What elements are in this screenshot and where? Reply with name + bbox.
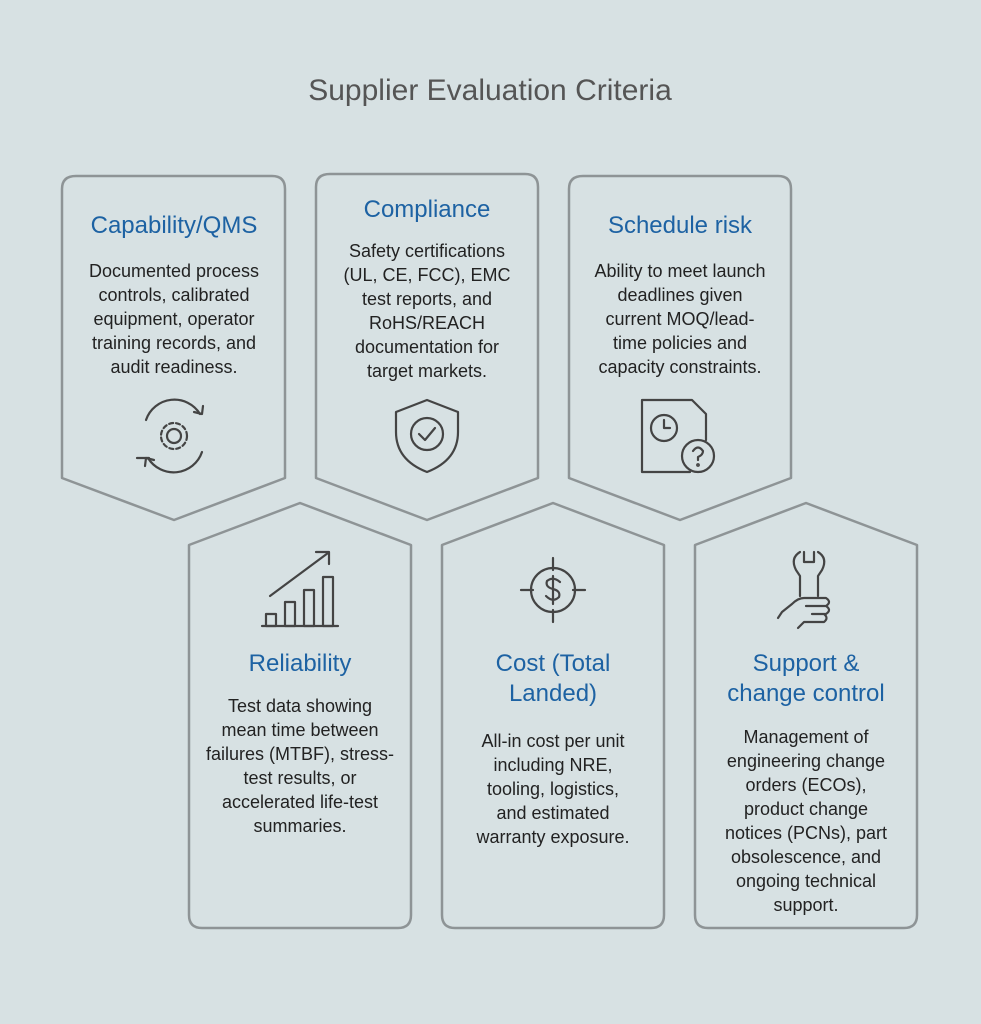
panel: reliability [189, 503, 411, 928]
panel: compliance [316, 174, 538, 520]
icon: dollar target [521, 558, 585, 622]
panel: schedule risk: Ability to meet launch [594, 261, 766, 281]
panel: schedule risk: time policies and [613, 333, 747, 353]
panel: compliance: (UL, CE, FCC), EMC [343, 265, 511, 285]
panel: support & change control [695, 503, 917, 928]
panel: schedule risk [569, 176, 791, 520]
panel: capability/QMS [62, 176, 285, 520]
panel: cost [442, 503, 664, 928]
panel: reliability: failures (MTBF), stress- [206, 744, 394, 764]
panel: support & change control: product change [744, 799, 868, 819]
panel: support & change control: engineering change [727, 751, 885, 771]
title: Supplier Evaluation Criteria [308, 74, 672, 107]
panel: reliability: mean time between [221, 720, 379, 740]
panel: schedule risk: capacity constraints. [598, 357, 762, 377]
panel: cost: and estimated [496, 803, 610, 823]
panel: capability/QMS: Documented process [89, 261, 259, 281]
panel: cost: including NRE, [493, 755, 613, 775]
panel: reliability: Test data showing [228, 696, 372, 716]
panel: reliability: test results, or [243, 768, 357, 788]
panel: compliance: test reports, and [362, 289, 492, 309]
panel: support & change control: orders (ECOs), [745, 775, 867, 795]
panel: support & change control: ongoing technical [736, 871, 876, 891]
panel: cost: All-in cost per unit [481, 731, 625, 751]
panel: compliance: Safety certifications [349, 241, 505, 261]
panel: support & change control: obsolescence, and [731, 847, 881, 867]
panel: schedule risk: Schedule risk [608, 212, 753, 239]
panel: cost: warranty exposure. [475, 827, 630, 847]
panel: compliance: Compliance [364, 196, 490, 223]
icon: clock doc question [642, 400, 714, 472]
panel: capability/QMS: controls, calibrated [98, 285, 250, 305]
panel: support & change control: Management of [743, 727, 870, 747]
panel: support & change control: support. [773, 895, 839, 915]
panel: cost: Cost (Total [496, 650, 610, 677]
panel: reliability: summaries. [253, 816, 347, 836]
panel: support & change control: change control [727, 680, 885, 707]
icon: bar chart up [262, 552, 338, 626]
panel: support & change control: Support & [753, 650, 859, 677]
icon: shield check [396, 400, 458, 472]
panel: capability/QMS: Capability/QMS [91, 212, 257, 239]
panel: capability/QMS: equipment, operator [93, 309, 255, 329]
panel: compliance: target markets. [367, 361, 487, 381]
panel: schedule risk: deadlines given [617, 285, 743, 305]
panel: compliance: documentation for [355, 337, 499, 357]
panel: cost: Landed) [509, 680, 597, 707]
panel: capability/QMS: audit readiness. [110, 357, 238, 377]
panel: reliability: accelerated life-test [222, 792, 378, 812]
panel: reliability: Reliability [249, 650, 351, 677]
panel: support & change control: notices (PCNs), part [725, 823, 887, 843]
icon: wrench hand [778, 552, 829, 628]
panel: cost: tooling, logistics, [487, 779, 619, 799]
panel: schedule risk: current MOQ/lead- [605, 309, 755, 329]
icon: gear cycle [137, 400, 203, 472]
panel: compliance: RoHS/REACH [369, 313, 485, 333]
panel: capability/QMS: training records, and [92, 333, 256, 353]
